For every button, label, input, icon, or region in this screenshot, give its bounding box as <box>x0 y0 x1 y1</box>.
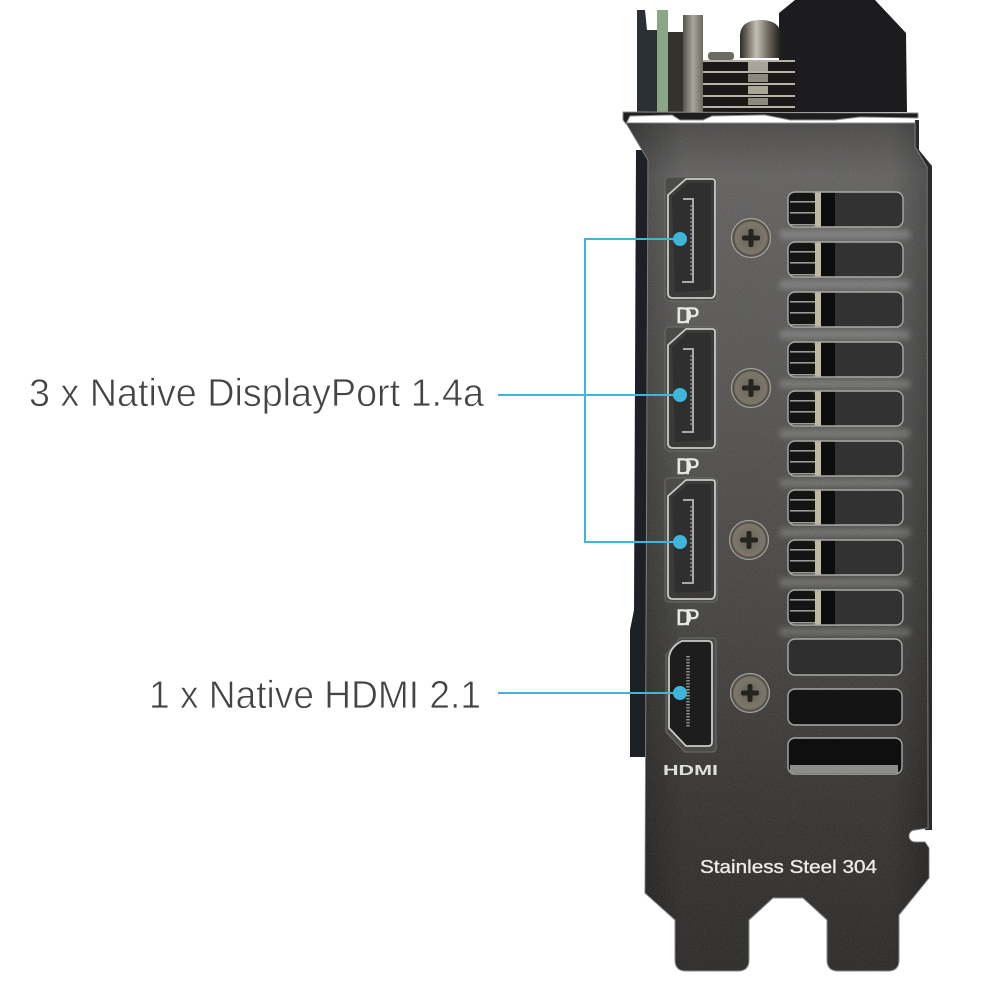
bracket material label: Stainless Steel 304 <box>700 857 877 877</box>
icon: mounting screw post <box>740 20 781 58</box>
left backplate edge <box>630 150 648 757</box>
DisplayPort logo 1: DP <box>676 303 699 328</box>
HDMI connector <box>666 638 716 752</box>
DisplayPort logo 3: DP <box>676 605 699 630</box>
callout: HDMI connector line <box>498 686 687 700</box>
plate shading and texture <box>620 110 940 980</box>
steel bracket plate <box>626 123 929 971</box>
graphics card internals above bracket <box>637 0 907 112</box>
ventilation slots with fins <box>788 192 903 625</box>
HDMI port label: HDMI <box>663 762 718 779</box>
icon: heatsink fins <box>703 52 795 112</box>
right bracket fold <box>915 120 932 830</box>
icon: dark board edge <box>637 10 657 112</box>
icon: board components <box>668 32 683 112</box>
DisplayPort logo 2: DP <box>676 454 699 479</box>
DisplayPort connector 1 <box>665 177 717 301</box>
screw 3 <box>729 520 769 560</box>
icon: green circuit board <box>657 10 668 112</box>
label: DisplayPort: 3 x Native DisplayPort 1.4a <box>29 372 484 415</box>
ventilation slots without fins <box>788 639 902 774</box>
screw 1 <box>731 218 771 258</box>
callout: DisplayPort connector lines <box>498 232 687 549</box>
screw 2 <box>731 368 771 408</box>
bracket top lip <box>623 112 918 124</box>
icon: silver bar <box>683 15 703 112</box>
icon: black cooler shroud <box>779 0 907 112</box>
DisplayPort connector 2 <box>665 327 717 451</box>
label: HDMI: 1 x Native HDMI 2.1 <box>149 674 481 717</box>
DisplayPort connector 3 <box>665 478 717 602</box>
screw 4 <box>730 673 770 713</box>
